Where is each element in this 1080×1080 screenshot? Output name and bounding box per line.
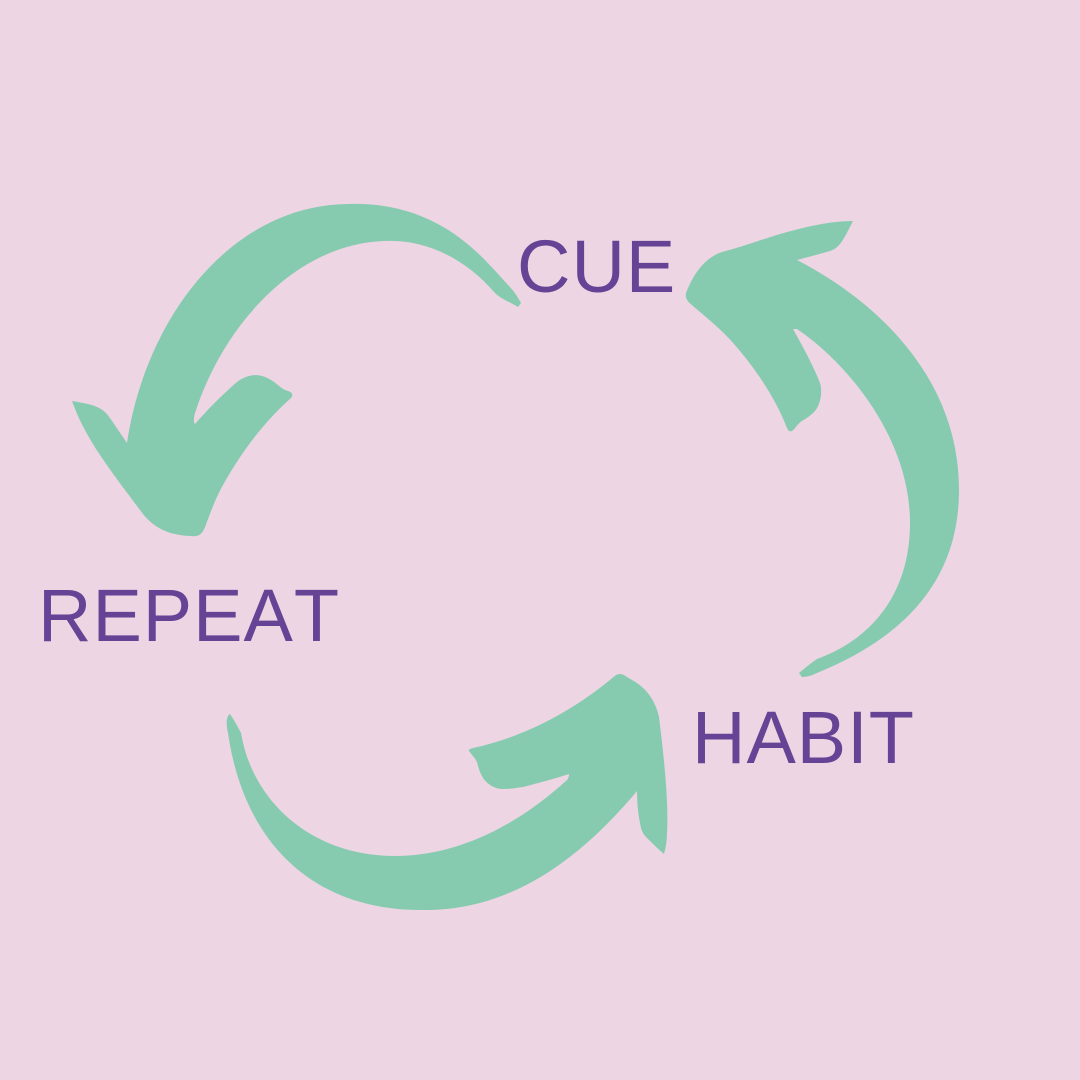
label: HABIT: HABIT — [692, 696, 915, 779]
arrow: repeat to habit — [227, 674, 667, 910]
label: REPEAT: REPEAT — [38, 574, 340, 657]
label: CUE: CUE — [517, 225, 676, 308]
arrow: cue to repeat — [72, 204, 521, 536]
arrow: habit to cue — [686, 221, 959, 677]
